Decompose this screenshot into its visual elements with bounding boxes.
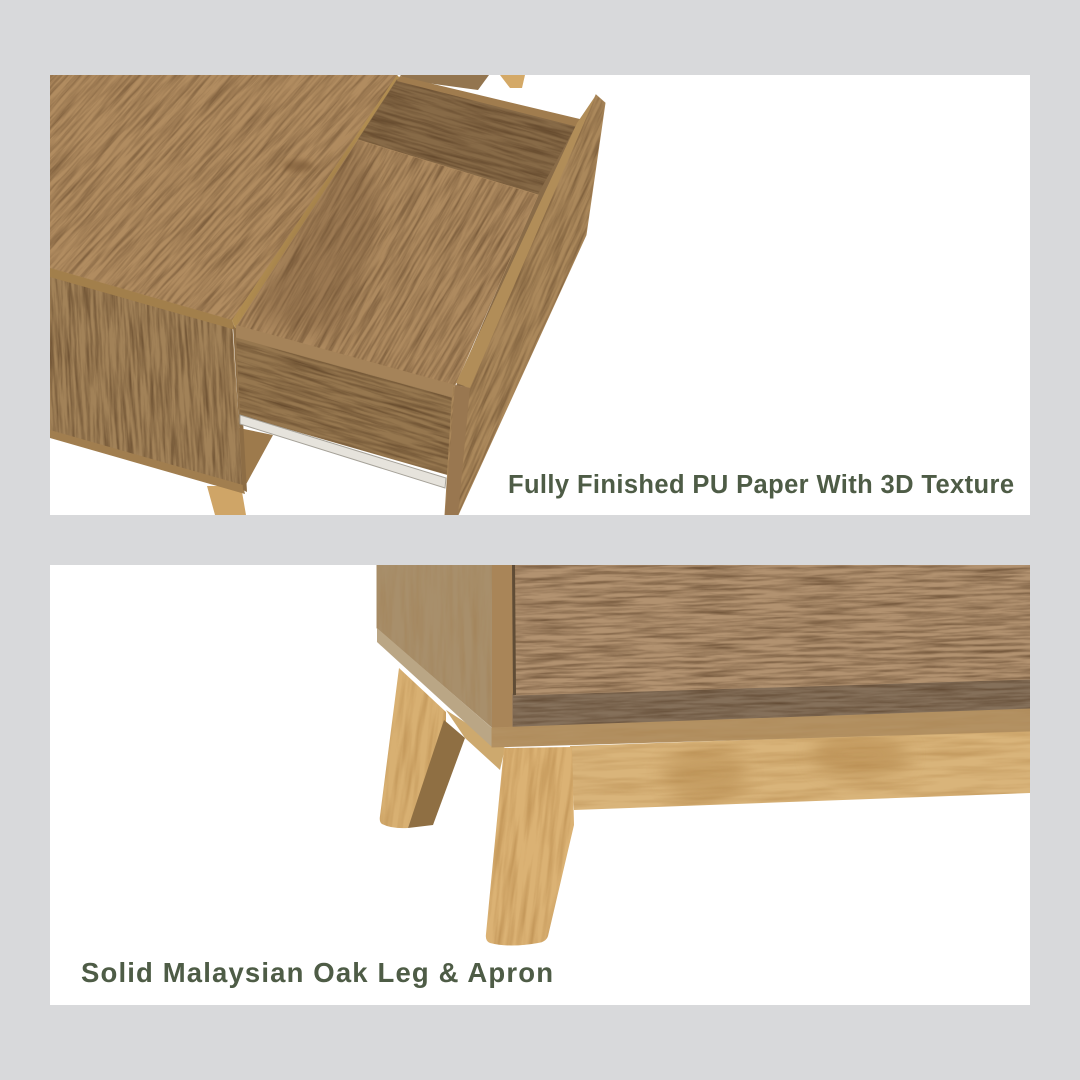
rear leg stub bbox=[500, 75, 525, 88]
side panel right edge bbox=[233, 326, 247, 492]
caption: Fully Finished PU Paper With 3D Texture bbox=[508, 471, 1014, 499]
drawer inner side wall bbox=[456, 124, 577, 387]
shadow along the cabinet edge bbox=[256, 152, 379, 338]
apron colour blotches bbox=[663, 733, 908, 799]
recessed shadow panel bbox=[513, 678, 1030, 728]
cabinet bottom edge bbox=[377, 628, 492, 747]
back leg lit face bbox=[380, 668, 446, 828]
base strip bbox=[492, 709, 1030, 747]
top drawer-side edge bbox=[232, 75, 400, 330]
solid oak apron bbox=[570, 730, 1030, 810]
short apron underside bbox=[446, 710, 505, 770]
front leg bbox=[207, 486, 246, 515]
drawer face bbox=[513, 565, 1030, 695]
drawer left shadow line bbox=[512, 565, 516, 695]
knot bbox=[283, 160, 313, 172]
underside of cabinet bbox=[239, 428, 273, 484]
top front edge bbox=[50, 268, 236, 330]
drawer front lip bbox=[236, 325, 455, 398]
back leg bbox=[380, 668, 465, 828]
back leg shaded face bbox=[408, 720, 465, 828]
side front edge bbox=[492, 565, 513, 728]
cabinet top surface bbox=[50, 75, 397, 320]
panel: oak leg and apron bbox=[50, 565, 1030, 1005]
panel: PU paper texture bbox=[50, 75, 1030, 515]
drawer front panel left edge bbox=[445, 385, 470, 515]
front leg bbox=[486, 747, 574, 946]
drawer front panel inner edge bbox=[456, 95, 596, 388]
cabinet side panel bbox=[50, 277, 243, 490]
rear cabinet stub behind the drawer bbox=[400, 75, 489, 90]
drawer inner front bbox=[236, 338, 453, 475]
metal drawer rail bbox=[240, 415, 446, 488]
drawer back wall bbox=[358, 80, 577, 195]
side panel bottom edge bbox=[50, 430, 245, 494]
drawer floor bbox=[237, 140, 538, 385]
caption: Solid Malaysian Oak Leg & Apron bbox=[81, 957, 553, 988]
drawer front panel bbox=[445, 95, 605, 515]
drawer back top edge bbox=[397, 76, 584, 127]
cabinet side bbox=[377, 565, 493, 728]
